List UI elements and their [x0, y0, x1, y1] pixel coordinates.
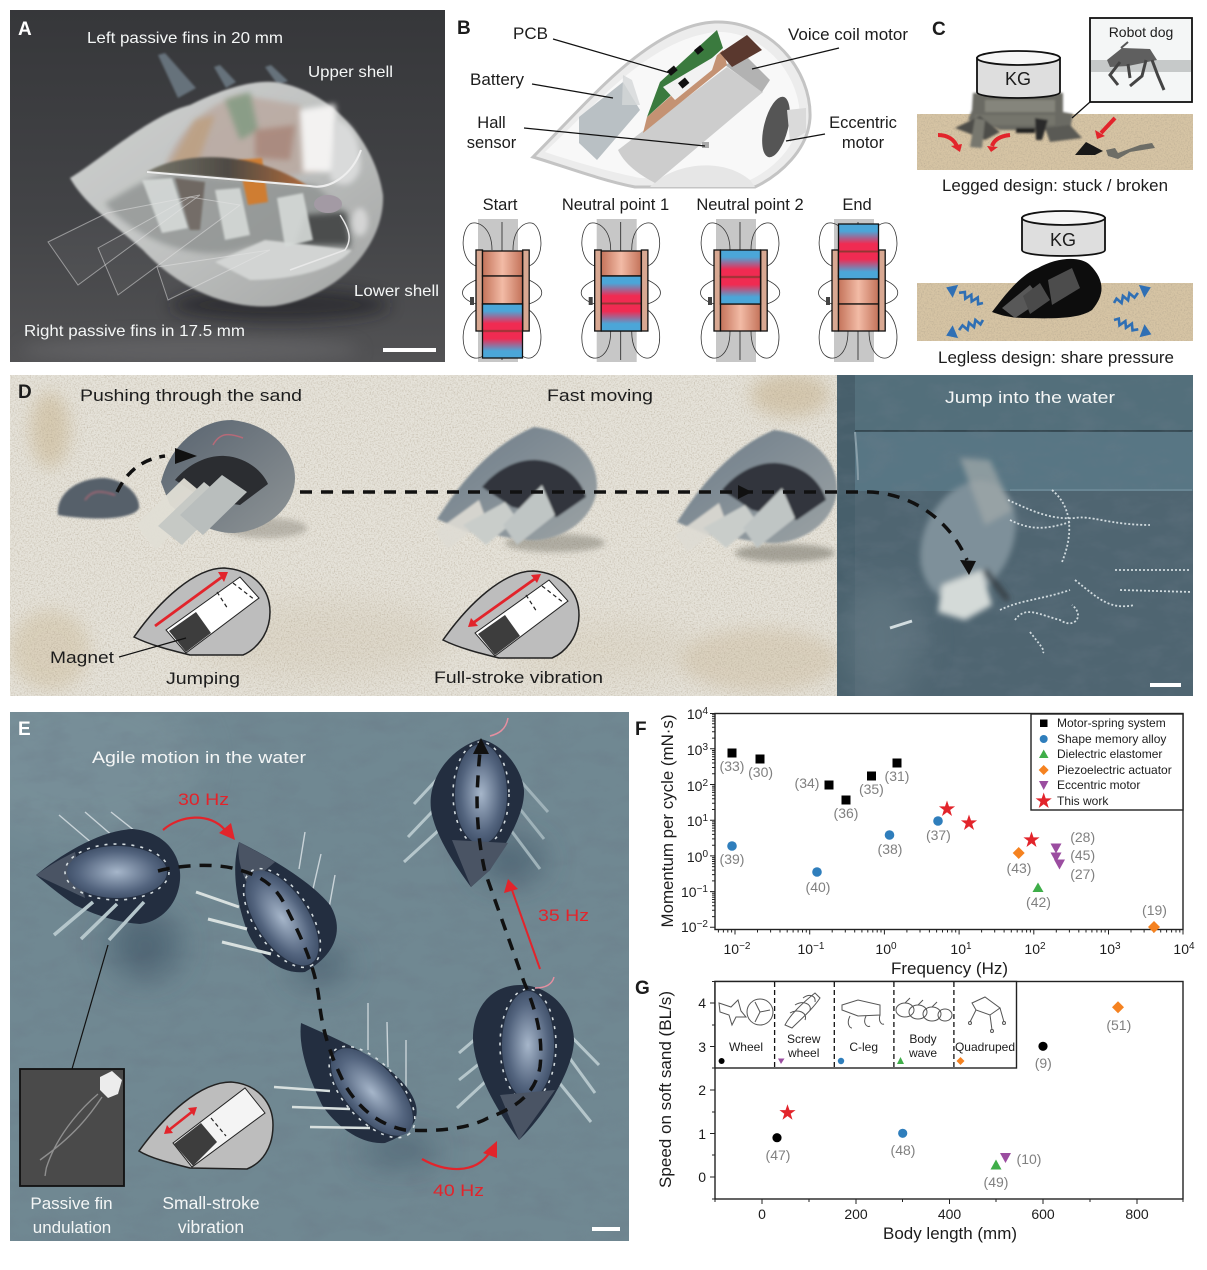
- y tick labels: 2: [702, 778, 708, 789]
- lower shell shade: [650, 165, 755, 187]
- diagram: Neutral point 1: Neutral point 1: [562, 196, 669, 214]
- diagram: End: End: [842, 196, 872, 214]
- leader to inset: [72, 945, 108, 1069]
- scale bar E: [592, 1227, 620, 1231]
- sand strip bottom: [917, 283, 1193, 341]
- voice coil cylinder: [618, 67, 763, 183]
- legend: This work: [1057, 794, 1109, 808]
- inset labels: wave: [908, 1046, 937, 1060]
- legend: Eccentric motor: [1057, 778, 1140, 792]
- citation labels: (51): [1106, 1017, 1131, 1033]
- sand strip top: [917, 114, 1193, 170]
- jump arrowhead: [175, 448, 197, 464]
- letter C: C: [932, 19, 946, 40]
- shadow under robot: [170, 289, 390, 321]
- legend: [1031, 714, 1183, 810]
- robot 3 shadow: [735, 544, 835, 562]
- letter B: B: [457, 18, 471, 39]
- citation labels: (9): [1035, 1055, 1052, 1071]
- top fin lens: [147, 157, 308, 186]
- robot dog under load: [955, 93, 1082, 148]
- citation labels: (35): [859, 781, 884, 797]
- icon: quadruped: [968, 997, 1006, 1032]
- label: Small-stroke vibration: vibration: [178, 1217, 244, 1237]
- citation labels: (49): [984, 1174, 1008, 1190]
- x tick labels: 4: [1189, 941, 1195, 952]
- leader lines: [524, 39, 839, 146]
- label: Fast moving: Fast moving: [547, 386, 653, 405]
- label: Agile motion: Agile motion in the water: [92, 748, 306, 767]
- tick labels: 600: [1031, 1206, 1055, 1222]
- letter F: F: [635, 719, 647, 740]
- inset labels: Quadruped: [955, 1040, 1015, 1054]
- label: Eccentric motor: Eccentric: [829, 114, 897, 132]
- x tick labels: 10: [724, 941, 739, 957]
- citation labels: (36): [834, 805, 858, 821]
- motor-spring points: [728, 748, 902, 804]
- electronics colour window: [165, 95, 320, 180]
- dashed swim path: [158, 752, 541, 1130]
- citation labels: (37): [926, 827, 951, 843]
- robot 3 arrowhead: [738, 485, 752, 499]
- robot 1: [136, 420, 295, 550]
- icon: screw wheel: [785, 993, 820, 1028]
- load cylinder KG bottom: [1022, 211, 1105, 256]
- arrow 35 Hz: [504, 879, 540, 969]
- icon: C-leg: [842, 1000, 884, 1028]
- citation labels: (33): [720, 758, 744, 774]
- small buried robot: [58, 478, 139, 519]
- fin mount dark interior: [175, 178, 205, 230]
- y tick labels: 10: [687, 813, 702, 829]
- tick labels: 400: [938, 1206, 961, 1222]
- label: Hall sensor: Hall: [477, 114, 506, 132]
- inset: fin undulation: [20, 1069, 124, 1186]
- inset: robot dog: [1090, 18, 1192, 102]
- tick labels: 200: [844, 1206, 868, 1222]
- inset labels: wheel: [787, 1046, 819, 1060]
- label: 30 Hz: 30 Hz: [178, 790, 229, 809]
- diagram: End: [818, 196, 898, 362]
- dark clear patch: [295, 212, 350, 245]
- label: Full-stroke vibration: Full-stroke vibration: [434, 668, 603, 687]
- y tick labels: 4: [702, 706, 708, 717]
- x tick labels: 1: [966, 941, 972, 952]
- citation labels: (39): [720, 851, 744, 867]
- y tick labels: 10: [687, 778, 702, 794]
- panel: E swimming: [0, 680, 629, 1241]
- splash: [890, 490, 1192, 653]
- label: Hall sensor: sensor: [467, 134, 517, 152]
- diagram: Neutral point 2: [696, 196, 804, 362]
- diagram: Neutral point 2: Neutral point 2: [696, 196, 804, 214]
- x axis title: Body length (mm): [883, 1225, 1017, 1243]
- inset: robot dog: Robot dog: [1109, 24, 1173, 40]
- citation labels: (45): [1070, 847, 1095, 863]
- blue pressure arrows: [943, 281, 1154, 342]
- x ticks: [718, 930, 1183, 934]
- magnet leader: [119, 638, 186, 657]
- label: Eccentric motor: motor: [842, 134, 885, 152]
- x tick labels: −2: [739, 941, 751, 952]
- y tick labels: 10: [681, 884, 697, 900]
- letter G: G: [635, 978, 650, 999]
- jump dashed trajectory: [117, 456, 165, 492]
- citation labels: (43): [1007, 860, 1031, 876]
- tick labels: 4: [698, 995, 706, 1011]
- this work stars: [939, 800, 1040, 847]
- x tick labels: 0: [891, 941, 897, 952]
- label: Battery: Battery: [470, 71, 525, 89]
- fin mounts: [142, 178, 313, 247]
- y axis title: Speed on soft sand (BL/s): [657, 991, 675, 1188]
- robot 2 shadow: [505, 534, 605, 552]
- robot 1: [36, 812, 180, 940]
- robot 2: [196, 832, 337, 980]
- main dashed trajectory: [300, 492, 967, 560]
- label: Pushing through the sand: Pushing through the sand: [80, 386, 302, 405]
- citation labels: (10): [1017, 1151, 1041, 1167]
- cutaway shell: [533, 22, 810, 187]
- inset: design strip: [715, 982, 1016, 1068]
- panel: A transparent robot photo: [10, 10, 445, 364]
- label: Jump into the water: Jump into the water: [945, 388, 1115, 407]
- diagram: Start: Start: [483, 196, 518, 214]
- citation labels: [766, 1017, 1131, 1190]
- robot 1 shadow: [223, 518, 307, 538]
- label: 40 Hz: 40 Hz: [433, 1181, 484, 1200]
- piezo diamonds: [1013, 847, 1160, 933]
- robot 5: [457, 977, 599, 1140]
- data points: [772, 1001, 1124, 1170]
- y tick labels: 0: [702, 849, 708, 860]
- citation labels: (30): [748, 764, 773, 780]
- label: Passive fin undulation: undulation: [33, 1218, 111, 1237]
- sand background: [10, 373, 840, 696]
- panel: B internal design and magnet states: [457, 18, 909, 362]
- label: Jumping: Jumping: [166, 669, 240, 688]
- scale bar A: [383, 348, 436, 352]
- robot shell: [70, 82, 383, 307]
- citation labels: [720, 758, 1167, 918]
- broken parts: [1075, 142, 1155, 159]
- ticks: [710, 982, 1183, 1204]
- label: left fins: Left passive fins in 20 mm: [87, 30, 283, 47]
- inset leader: [1072, 102, 1090, 118]
- legend: Dielectric elastomer: [1057, 747, 1162, 761]
- citation labels: (40): [806, 879, 830, 895]
- panel: D sand to water: [10, 373, 1193, 700]
- robot 3 blurred: [675, 430, 837, 552]
- robot 4: [274, 1003, 430, 1152]
- water-jump robot blur: [902, 458, 1034, 620]
- axes frame: [715, 714, 1183, 930]
- citation labels: (42): [1026, 894, 1051, 910]
- y tick labels: 10: [687, 742, 702, 758]
- icon: body wave: [896, 998, 952, 1021]
- background sheen: [37, 336, 344, 362]
- y tick labels: 10: [687, 849, 702, 865]
- x tick labels: 10: [798, 941, 813, 957]
- coin: [314, 195, 342, 213]
- label: right fins: Right passive fins in 17.5 mm: [24, 323, 245, 340]
- citation labels: (19): [1142, 902, 1167, 918]
- axes frame: [715, 982, 1183, 1199]
- y tick labels: 1: [702, 813, 708, 824]
- y ticks: [710, 714, 715, 927]
- white motor: [300, 104, 340, 172]
- voice coil dark block: [720, 35, 762, 67]
- swim arrowhead: [473, 738, 489, 754]
- citation labels: (38): [878, 841, 902, 857]
- water background: [837, 375, 1193, 700]
- diagram: Neutral point 1: [562, 196, 669, 362]
- label: 35 Hz: 35 Hz: [538, 906, 589, 925]
- tick labels: 800: [1125, 1206, 1149, 1222]
- y tick labels: [681, 706, 708, 935]
- x tick labels: 10: [1173, 941, 1189, 957]
- label: Magnet: Magnet: [50, 648, 114, 667]
- lower shell bright panel: [215, 240, 352, 280]
- x tick labels: 10: [950, 941, 966, 957]
- legend: Piezoelectric actuator: [1057, 763, 1172, 777]
- orange flex circuit: [238, 158, 268, 205]
- upper passive fins: [158, 53, 288, 98]
- y tick labels: −2: [697, 919, 708, 930]
- clear right passive fins: [48, 195, 270, 300]
- citation labels: (27): [1070, 866, 1095, 882]
- citation labels: (48): [891, 1142, 915, 1158]
- arrow 40 Hz: [422, 1141, 497, 1169]
- inset labels: C-leg: [849, 1040, 878, 1054]
- copper band: [643, 50, 727, 133]
- x tick labels: 3: [1115, 941, 1121, 952]
- letter D: D: [18, 382, 32, 403]
- legend: Shape memory alloy: [1057, 732, 1166, 746]
- eccentric triangles: [1050, 844, 1065, 870]
- schematic: jumping: [134, 568, 270, 655]
- label: PCB: PCB: [513, 25, 548, 43]
- x tick labels: −1: [813, 941, 825, 952]
- tick labels: 0: [758, 1206, 766, 1222]
- x tick labels: 10: [875, 941, 891, 957]
- caption legless: Legless design: share pressure: [938, 349, 1174, 367]
- inset markers: [719, 1058, 725, 1064]
- inset labels: Body: [909, 1032, 937, 1046]
- x tick labels: 10: [1024, 941, 1040, 957]
- water arrowhead: [960, 560, 976, 575]
- chart F: momentum vs frequency: [635, 706, 1195, 978]
- diagram: Start: [462, 196, 542, 362]
- citation labels: (31): [885, 768, 909, 784]
- label: lower shell: Lower shell: [354, 283, 439, 300]
- black robot: [992, 259, 1102, 318]
- x tick labels: 2: [1040, 941, 1046, 952]
- y tick labels: −1: [697, 884, 708, 895]
- schematic: small stroke: [139, 1082, 273, 1169]
- chart G: speed vs body length: [635, 978, 1183, 1243]
- y axis title: Momentum per cycle (mN·s): [659, 714, 677, 928]
- citation labels: (28): [1070, 829, 1095, 845]
- load cylinder KG bottom: KG: [1050, 230, 1076, 250]
- inset labels: Wheel: [729, 1040, 763, 1054]
- red arrows: [938, 118, 1115, 147]
- load cylinder KG top: [977, 51, 1060, 98]
- tick labels: [698, 995, 1149, 1222]
- tick labels: 1: [698, 1126, 706, 1142]
- citation labels: (47): [766, 1147, 790, 1163]
- x tick labels: 10: [1099, 941, 1115, 957]
- lower translucent region: [105, 173, 352, 253]
- x tick labels: [724, 941, 1195, 957]
- SMA points: [727, 816, 943, 877]
- battery: [579, 82, 640, 160]
- panel: C legged vs legless: [917, 18, 1193, 367]
- arrow 30 Hz: [163, 818, 235, 840]
- label: Voice coil motor: Voice coil motor: [788, 26, 909, 44]
- tick labels: 0: [698, 1169, 706, 1185]
- PCB: [647, 30, 723, 117]
- robot 3: [404, 718, 548, 887]
- schematic: full-stroke: [443, 571, 579, 658]
- eccentric motor: [757, 94, 795, 160]
- shadows: [109, 838, 545, 1164]
- load cylinder KG top: KG: [1005, 69, 1031, 89]
- y tick labels: 3: [702, 742, 708, 753]
- y tick labels: 10: [681, 919, 697, 935]
- tick labels: 2: [698, 1082, 706, 1098]
- letter A: A: [18, 19, 32, 40]
- robot 2 blurred: [435, 427, 597, 549]
- icon: wheels: [719, 999, 773, 1025]
- caption legged: Legged design: stuck / broken: [942, 177, 1168, 195]
- hall sensor chip: [702, 142, 709, 148]
- inset labels: [729, 1032, 1015, 1060]
- scale bar D: [1150, 683, 1181, 687]
- tick labels: 3: [698, 1039, 706, 1055]
- x axis title: Frequency (Hz): [891, 960, 1008, 978]
- inset labels: Screw: [787, 1032, 820, 1046]
- label: Passive fin undulation: Passive fin: [30, 1194, 113, 1213]
- legend: Motor-spring system: [1057, 716, 1166, 730]
- y tick labels: 10: [687, 706, 702, 722]
- label: upper shell: Upper shell: [308, 64, 393, 81]
- letter E: E: [18, 719, 31, 740]
- citation labels: (34): [795, 775, 819, 791]
- elastomer triangle: [1032, 882, 1044, 892]
- label: Small-stroke vibration: Small-stroke: [162, 1193, 260, 1213]
- water background: [0, 680, 629, 1241]
